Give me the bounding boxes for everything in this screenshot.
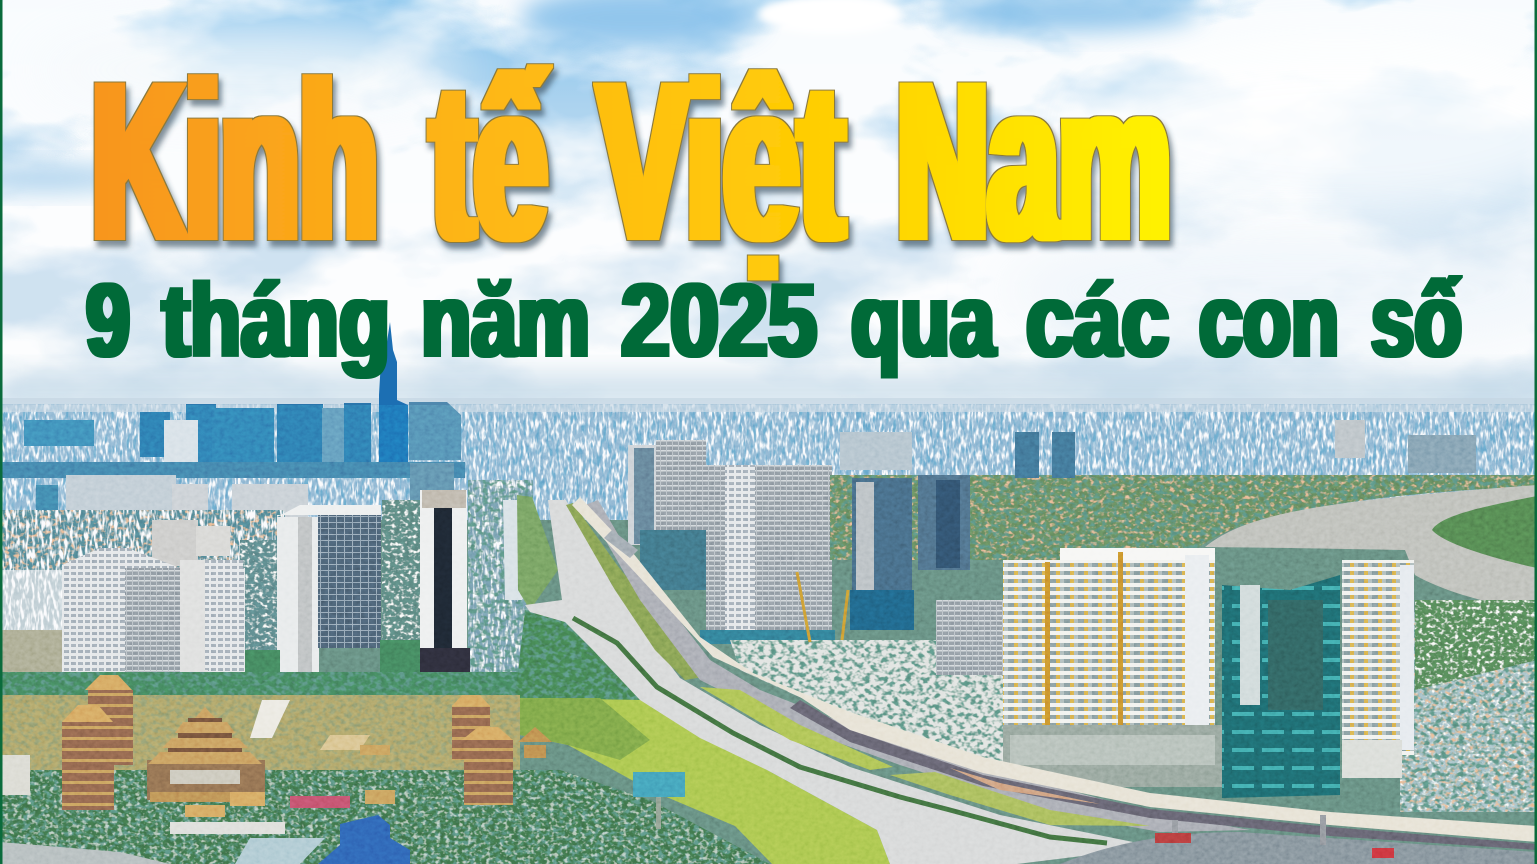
middle row of pale buildings: [0, 462, 533, 700]
villa neighbourhood and far city right: [830, 420, 1537, 560]
temple tower front right: [462, 727, 513, 805]
white apartment block left: [62, 548, 245, 680]
temple tower front left: [62, 705, 114, 810]
low cream building: [936, 600, 1003, 675]
distant city haze: [0, 398, 1537, 534]
river: [1205, 485, 1537, 611]
pale roofs bottom: [235, 838, 325, 864]
green glass office tower: [1222, 575, 1340, 798]
olive median: [566, 503, 703, 680]
subtitle: 9 tháng năm 2025 qua các con số: tháng: [162, 263, 390, 379]
temple tower back left: [85, 675, 133, 765]
ground base: [0, 520, 1537, 864]
cranes: [797, 572, 848, 642]
construction site: [730, 640, 1010, 770]
temple side halls: [185, 745, 395, 817]
bottom left grounds: [0, 695, 770, 864]
small pavilion: [518, 727, 552, 758]
low podium right: [1342, 740, 1402, 778]
subtitle: 9 tháng năm 2025 qua các con số: số: [1371, 263, 1462, 379]
service road: [585, 500, 1250, 832]
blue roofed building: [318, 815, 410, 864]
distant blue towers left: [24, 403, 371, 468]
dark blue towers: [850, 475, 970, 630]
title: Kinh tế Việt Nam: tế: [431, 34, 547, 287]
mid towers center: [628, 432, 912, 644]
canal and green median beside road: [503, 495, 558, 610]
riverside apartment complex: [1003, 548, 1414, 787]
elevated metro line: [572, 497, 1537, 850]
towers beside landmark: [409, 402, 461, 460]
subtitle: 9 tháng năm 2025 qua các con số: con: [1199, 263, 1339, 379]
temple tower back right: [452, 695, 490, 760]
glass tower with white side: [277, 505, 381, 675]
metro station roof: [604, 530, 638, 558]
lower flyover: [1060, 815, 1537, 864]
river island: [1432, 496, 1537, 568]
title: Kinh tế Việt Nam: Kinh: [92, 34, 378, 287]
subtitle: 9 tháng năm 2025 qua các con số: năm: [421, 263, 590, 379]
title: Kinh tế Việt Nam: Nam: [897, 34, 1171, 287]
subtitle: 9 tháng năm 2025 qua các con số: qua: [851, 263, 996, 379]
city photograph illustration: [0, 322, 1537, 864]
sky background with clouds: [0, 0, 1537, 420]
upper lawn: [700, 687, 893, 770]
dark podium: [382, 648, 470, 682]
dark median strip: [573, 618, 1107, 843]
landmark tower: [379, 322, 408, 465]
right area houses: [1400, 600, 1537, 812]
subtitle: 9 tháng năm 2025 qua các con số: 2025: [621, 263, 817, 379]
subtitle: 9 tháng năm 2025 qua các con số: 9: [86, 263, 130, 379]
highway roads: [525, 500, 1250, 864]
bright lawn beside highway: [520, 698, 890, 864]
title: Kinh tế Việt Nam: Việt: [598, 34, 844, 287]
lower thin lawn: [890, 772, 1150, 826]
title: Kinh tế Việt Nam: [92, 34, 1171, 287]
main pagoda: [147, 707, 265, 802]
billboard: [633, 772, 685, 829]
subtitle: 9 tháng năm 2025 qua các con số: các: [1026, 263, 1169, 379]
tower with dark stripe: [420, 490, 467, 648]
subtitle: 9 tháng năm 2025 qua các con số: [86, 263, 1462, 379]
tree band under towers: [0, 640, 540, 700]
trees left of road: [515, 610, 640, 702]
texture overlay: [0, 405, 1537, 864]
